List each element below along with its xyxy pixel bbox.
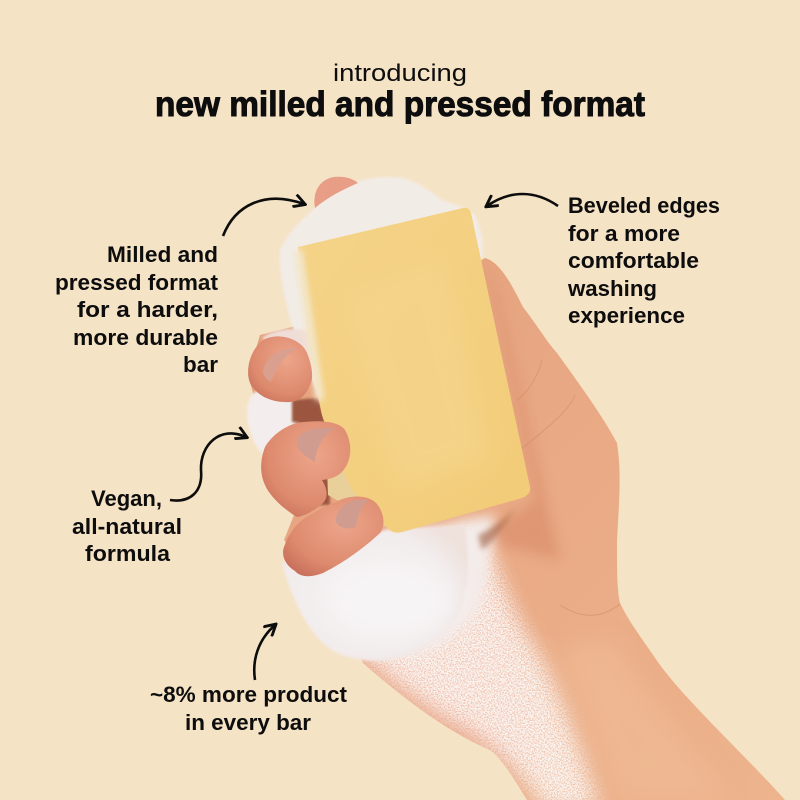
- arrow: [254, 625, 275, 680]
- text: formula: [85, 541, 171, 566]
- text: [55, 242, 219, 377]
- middle finger: [261, 421, 350, 517]
- thumb shadow along bar: [496, 356, 559, 559]
- title: [155, 60, 645, 124]
- wrist highlight: [579, 655, 654, 760]
- text: Milled and: [107, 242, 218, 267]
- callout: vegan formula: [72, 433, 246, 566]
- dark shadow behind bar edge: [292, 398, 330, 505]
- callout: beveled edges: [487, 193, 720, 328]
- arrow: [487, 194, 558, 206]
- foam film on back of hand: [360, 520, 600, 800]
- foam over index knuckle: [262, 329, 316, 365]
- text: ~8% more product: [150, 682, 348, 707]
- text: washing: [567, 276, 657, 301]
- foam body: [283, 525, 468, 661]
- text: bar: [183, 352, 218, 377]
- fingers: [248, 336, 383, 576]
- text: [150, 682, 348, 735]
- text: all-natural: [72, 514, 182, 539]
- text: experience: [568, 303, 685, 328]
- bar texture highlight: [345, 260, 490, 490]
- hand holding soap bar photo: [240, 177, 800, 800]
- text: [72, 486, 182, 566]
- top fingertip: [314, 177, 358, 208]
- side foam: [247, 390, 300, 454]
- top foam around bar: [280, 177, 483, 400]
- bar face: [298, 208, 530, 533]
- text: in every bar: [185, 710, 311, 735]
- thumbnail: [336, 500, 368, 528]
- text: [567, 193, 720, 328]
- foam soft halo: [380, 515, 495, 657]
- title headline: new milled and pressed format: [155, 85, 645, 124]
- foam wash on back of hand: [364, 560, 598, 800]
- title eyebrow: introducing: [333, 60, 467, 87]
- text: pressed format: [55, 270, 219, 295]
- bottom foam: [283, 515, 495, 661]
- text: Vegan,: [91, 486, 162, 511]
- middle fingernail: [297, 428, 335, 462]
- dark gap at palm: [478, 508, 515, 550]
- bar lower side: [326, 440, 392, 530]
- back of hand pink patch: [458, 734, 492, 752]
- palm crease: [517, 360, 575, 450]
- hand and arm: [240, 250, 800, 800]
- text: comfortable: [568, 248, 699, 273]
- upper fingernail: [263, 348, 297, 382]
- text: for a harder,: [77, 297, 218, 322]
- thumb: [283, 497, 383, 576]
- upper finger: [248, 336, 312, 402]
- text: for a more: [568, 221, 680, 246]
- text: Beveled edges: [568, 193, 720, 218]
- arrow: [170, 433, 246, 500]
- callout: milled and pressed format: [55, 199, 304, 377]
- soap bar: [298, 208, 530, 533]
- arrow: [223, 199, 304, 236]
- bar left foam edge: [298, 250, 320, 400]
- text: more durable: [73, 325, 218, 350]
- wrist crease: [560, 604, 620, 615]
- callout: more product: [150, 625, 348, 735]
